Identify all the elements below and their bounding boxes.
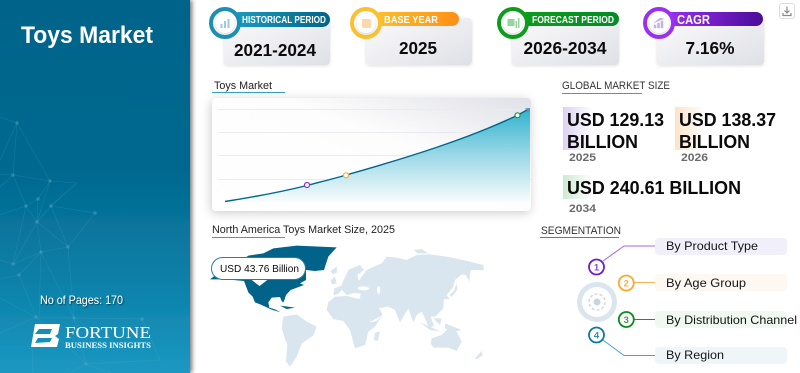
logo: Fortune Business Insights bbox=[31, 323, 152, 350]
card: base year: 2025 bbox=[399, 38, 437, 58]
stat: 2025 market size: 2025 bbox=[569, 152, 596, 164]
heading: global market size: GLOBAL MARKET SIZE bbox=[562, 80, 670, 92]
card: base year: BASE YEAR bbox=[384, 14, 438, 26]
network background pattern bbox=[0, 117, 160, 373]
card: forecast period: FORECAST PERIOD bbox=[532, 15, 614, 26]
heading: segmentation: SEGMENTATION bbox=[541, 225, 621, 237]
chart arrow tip bbox=[525, 108, 530, 113]
card: forecast period bbox=[499, 9, 619, 65]
chart line bbox=[225, 110, 527, 202]
stat: 2034 market size: 2034 bbox=[569, 203, 597, 215]
segment 1: by product type: By Product Type bbox=[666, 239, 758, 253]
data point 2034 bbox=[515, 113, 520, 118]
segment 2: by age group: By Age Group bbox=[666, 276, 746, 290]
stat: 2025 market size: BILLION bbox=[567, 132, 638, 152]
panel: growth chart bbox=[212, 98, 532, 211]
segment 2: by age group bbox=[619, 274, 787, 291]
stat: 2034 market size: USD 240.61 BILLION bbox=[567, 178, 741, 198]
card: CAGR: CAGR bbox=[677, 13, 710, 27]
card: historical period: HISTORICAL PERIOD bbox=[242, 15, 326, 26]
card: historical period: 2021-2024 bbox=[234, 40, 316, 60]
heading: toys market chart: Toys Market bbox=[214, 80, 272, 92]
icon: growth chart bbox=[654, 18, 664, 28]
chart area bbox=[225, 108, 530, 202]
card: CAGR bbox=[645, 9, 764, 65]
segment 4: by region: 4 bbox=[594, 330, 600, 342]
data point 2025 bbox=[304, 182, 310, 188]
card: base year bbox=[352, 9, 472, 65]
segment 2: by age group: 2 bbox=[624, 278, 629, 290]
data point 2026 bbox=[344, 173, 348, 178]
card: historical period bbox=[211, 9, 330, 65]
segment 4: by region bbox=[589, 328, 787, 364]
logo: Fortune Business Insights: BUSINESS INSIGHTS bbox=[65, 341, 152, 350]
logo: Fortune Business Insights: FORTUNE bbox=[65, 323, 151, 342]
icon: download button bbox=[780, 4, 794, 18]
segment 3: by distribution channel: 3 bbox=[624, 315, 629, 326]
card: CAGR: 7.16% bbox=[686, 38, 735, 58]
segment 4: by region: By Region bbox=[666, 348, 724, 362]
stat: 2025 market size: USD 129.13 bbox=[567, 110, 664, 130]
segment 1: by product type: 1 bbox=[594, 262, 600, 274]
icon: forecast screen bbox=[508, 18, 520, 28]
title: Toys Market bbox=[21, 22, 153, 49]
icon: calendar bbox=[362, 19, 371, 28]
stat: 2034 market size bbox=[563, 175, 741, 215]
stat: 2026 market size: BILLION bbox=[679, 132, 750, 152]
callout: north america value bbox=[212, 258, 306, 286]
segment 1: by product type bbox=[589, 238, 787, 274]
heading: north america: North America Toys Market Size, 2025 bbox=[212, 224, 395, 236]
card: forecast period: 2026-2034 bbox=[524, 38, 607, 58]
stat: 2026 market size: 2026 bbox=[681, 152, 708, 164]
stat: 2025 market size bbox=[563, 107, 664, 164]
callout: north america value: USD 43.76 Billion bbox=[220, 264, 299, 275]
segment 3: by distribution channel bbox=[619, 311, 797, 328]
icon: segmentation hub bbox=[580, 284, 614, 320]
stat: 2026 market size: USD 138.37 bbox=[679, 110, 776, 130]
stat: 2026 market size bbox=[675, 107, 776, 164]
icon: bar chart bbox=[220, 19, 230, 28]
segment 3: by distribution channel: By Distribution Channel bbox=[666, 313, 797, 327]
panel: sidebar bbox=[0, 0, 190, 373]
page count: No of Pages: 170 bbox=[40, 293, 123, 307]
rest of world bbox=[282, 249, 484, 367]
north america highlight bbox=[210, 246, 337, 312]
world map bbox=[210, 246, 484, 367]
